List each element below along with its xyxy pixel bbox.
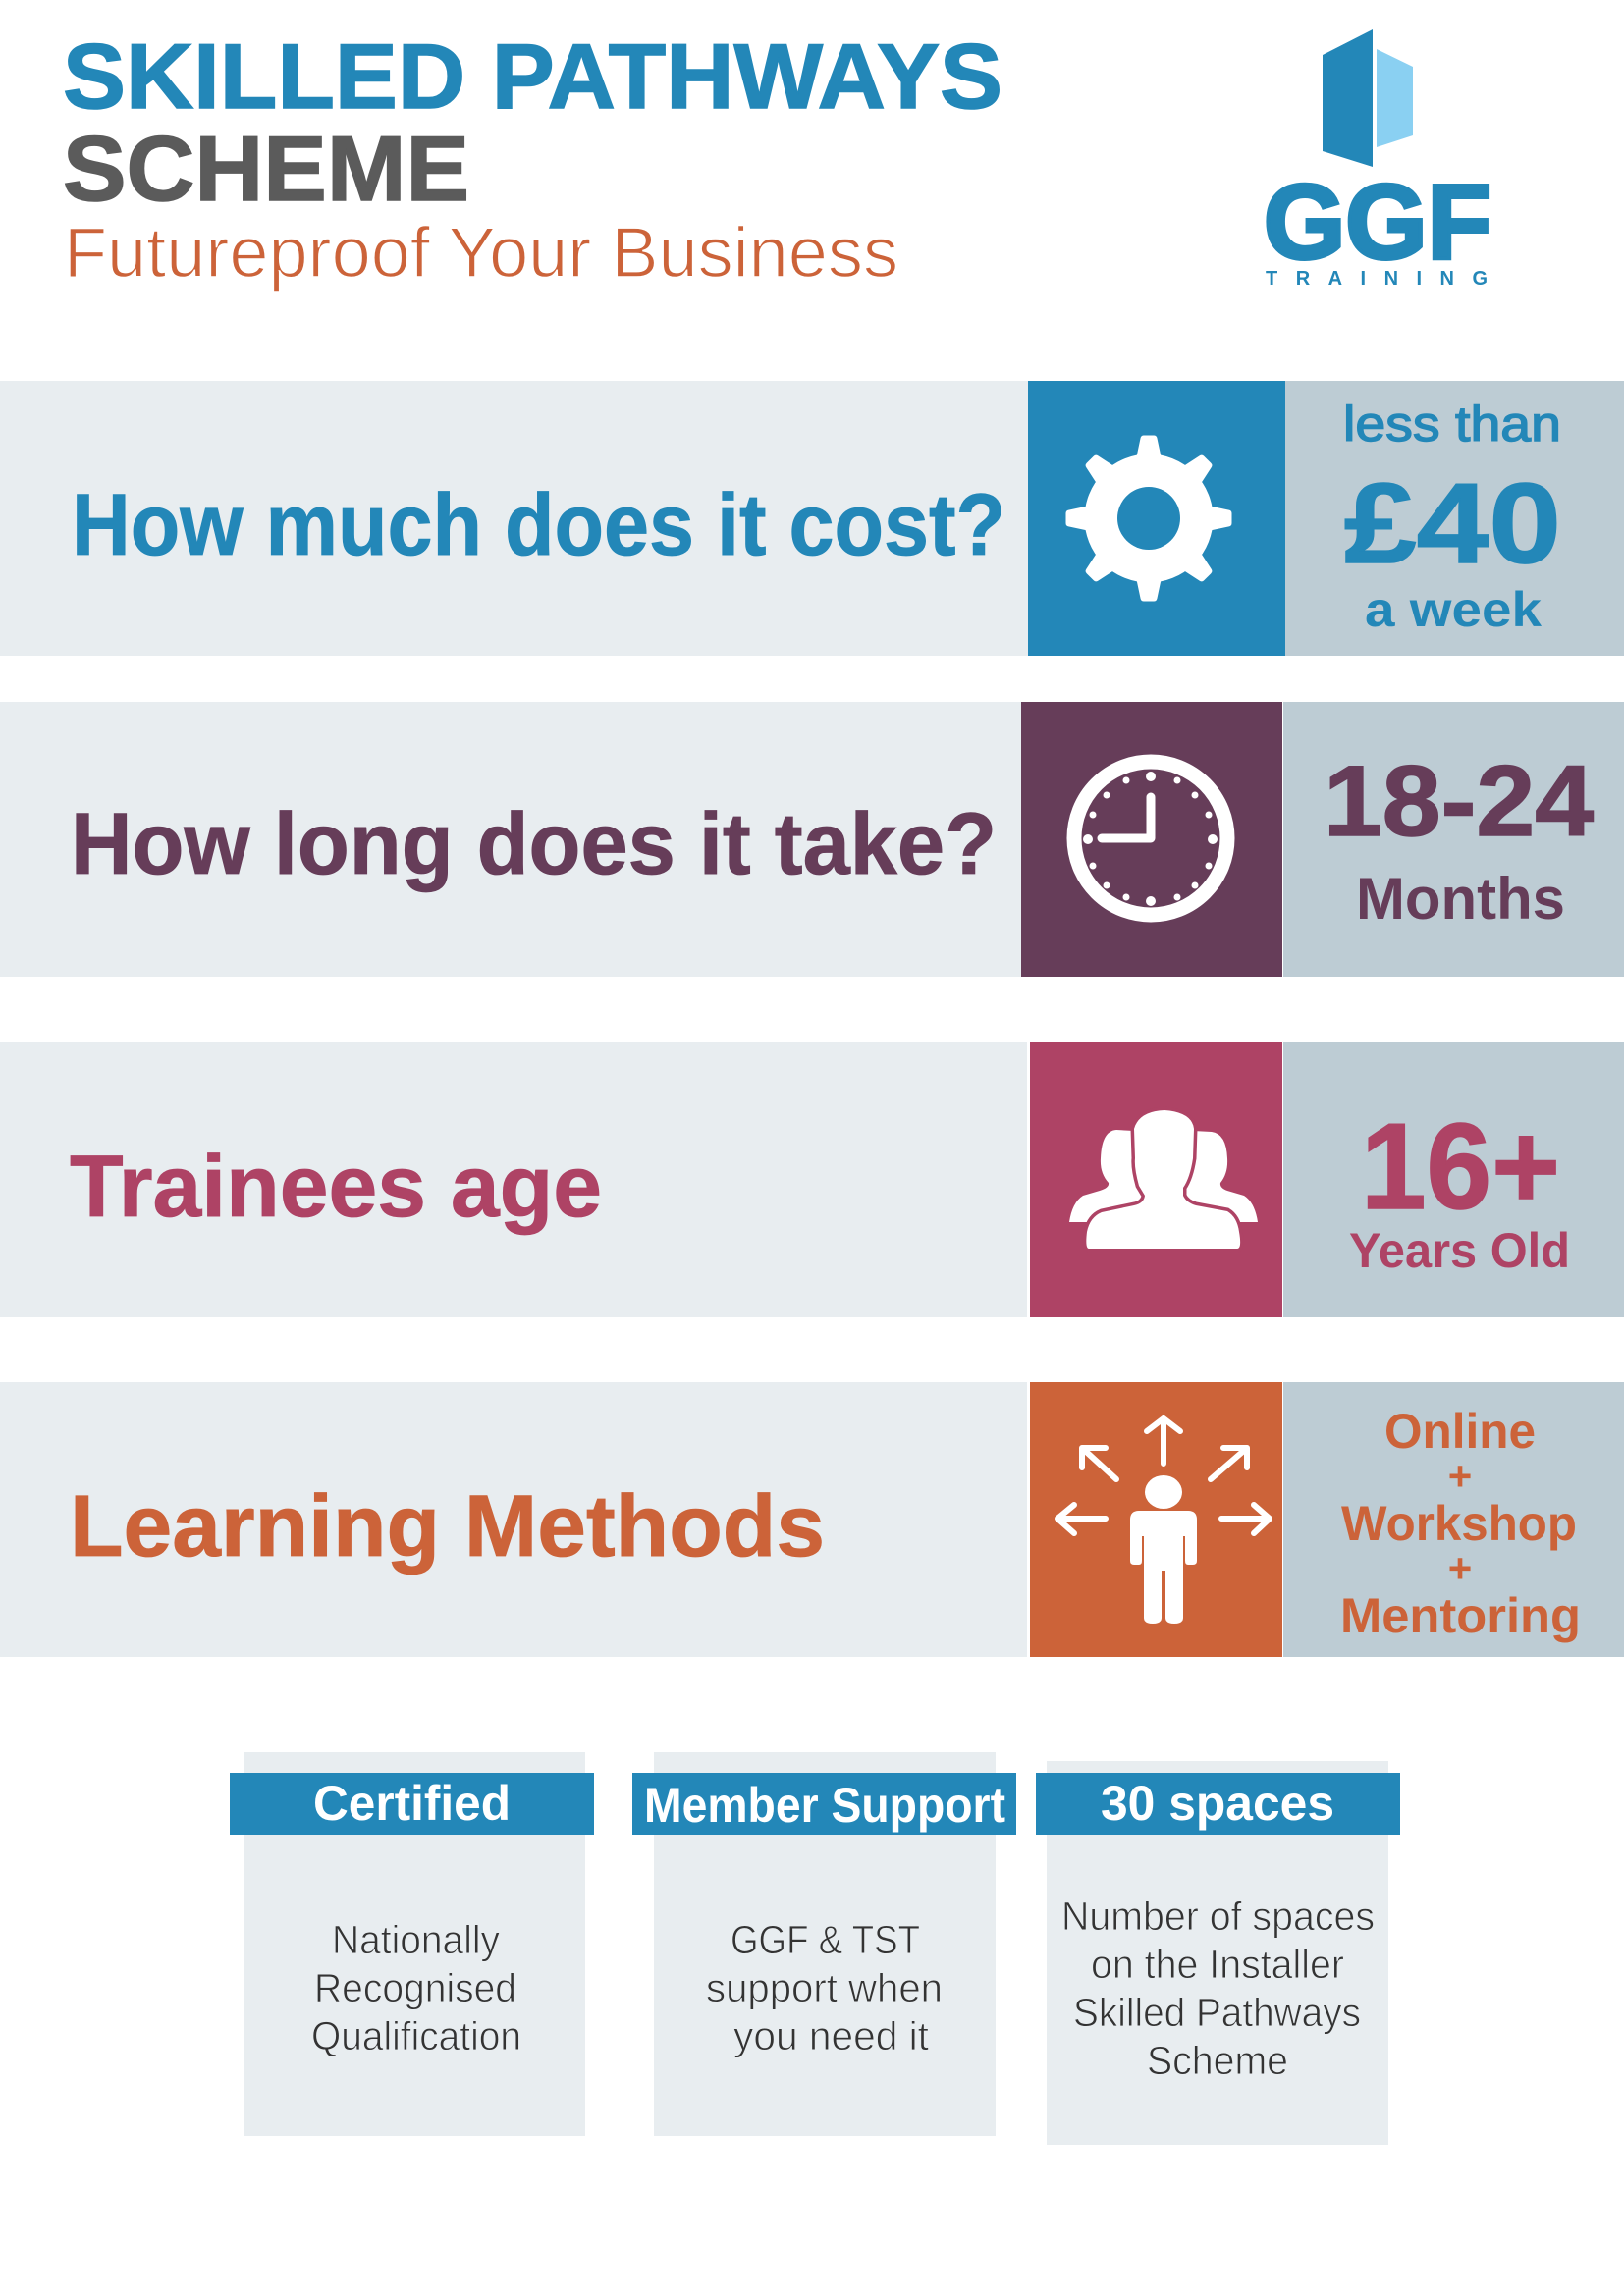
heading: duration: How long does it take?: [71, 794, 997, 892]
panel: learning methods: [0, 1382, 1624, 1657]
value: online workshop mentoring: [1340, 1404, 1581, 1643]
text: spaces description: on the Installer: [1091, 1942, 1344, 1987]
panel: trainee age: [0, 1042, 1624, 1317]
panel: cost: [0, 381, 1624, 656]
title: [63, 25, 1002, 293]
value: less than 40 pounds a week: [1343, 397, 1561, 637]
value: online workshop mentoring: Mentoring: [1340, 1588, 1581, 1643]
value: online workshop mentoring: +: [1448, 1545, 1472, 1591]
text: spaces description: Scheme: [1147, 2038, 1288, 2083]
title: SCHEME: [63, 117, 469, 220]
value: 18-24 months: 18-24: [1324, 745, 1594, 857]
text: spaces description: Skilled Pathways: [1073, 1990, 1361, 2035]
text: member support description: support when: [706, 1965, 943, 2010]
icon: group of people: [1069, 1110, 1258, 1249]
card: 30 spaces: [1036, 1761, 1400, 2145]
title: Futureproof Your Business: [64, 214, 898, 293]
value: 18-24 months: [1324, 745, 1594, 932]
value: 18-24 months: Months: [1356, 866, 1565, 932]
value: online workshop mentoring: Workshop: [1341, 1496, 1577, 1551]
icon: gear: [1069, 439, 1228, 598]
logo: GGF Training: TRAINING: [1266, 268, 1488, 290]
value: online workshop mentoring: Online: [1384, 1404, 1536, 1459]
text: spaces description: Number of spaces: [1061, 1894, 1375, 1939]
heading: learning methods: Learning Methods: [70, 1476, 825, 1575]
value: 16+ years old: 16+: [1361, 1099, 1560, 1235]
text: spaces description: [1061, 1894, 1375, 2083]
icon: clock: [1074, 762, 1227, 915]
card: certified: Certified: [313, 1776, 511, 1831]
card: certified: [230, 1752, 594, 2136]
card: 30 spaces: 30 spaces: [1101, 1776, 1334, 1831]
value: 16+ years old: Years Old: [1349, 1223, 1570, 1278]
value: online workshop mentoring: +: [1448, 1453, 1472, 1499]
logo: GGF Training: GGF: [1264, 162, 1491, 281]
heading: trainee age: Trainees age: [70, 1137, 602, 1235]
heading: cost: How much does it cost?: [72, 475, 1005, 573]
text: member support description: GGF & TST: [731, 1917, 920, 1962]
panel: duration: [0, 702, 1624, 977]
text: member support description: [706, 1917, 943, 2058]
text: certified description: Recognised: [314, 1965, 516, 2010]
text: member support description: you need it: [733, 2013, 930, 2058]
card: member support: Member Support: [644, 1778, 1005, 1833]
value: less than 40 pounds a week: a week: [1365, 582, 1542, 637]
text: certified description: Nationally: [332, 1917, 500, 1962]
value: less than 40 pounds a week: £40: [1344, 459, 1561, 587]
title: SKILLED PATHWAYS: [63, 25, 1002, 128]
logo: GGF Training: [1264, 29, 1491, 290]
value: less than 40 pounds a week: less than: [1343, 397, 1561, 452]
icon: person with arrows: [1057, 1418, 1270, 1624]
card: member support: [632, 1752, 1016, 2136]
text: certified description: [311, 1917, 521, 2058]
text: certified description: Qualification: [311, 2013, 521, 2058]
